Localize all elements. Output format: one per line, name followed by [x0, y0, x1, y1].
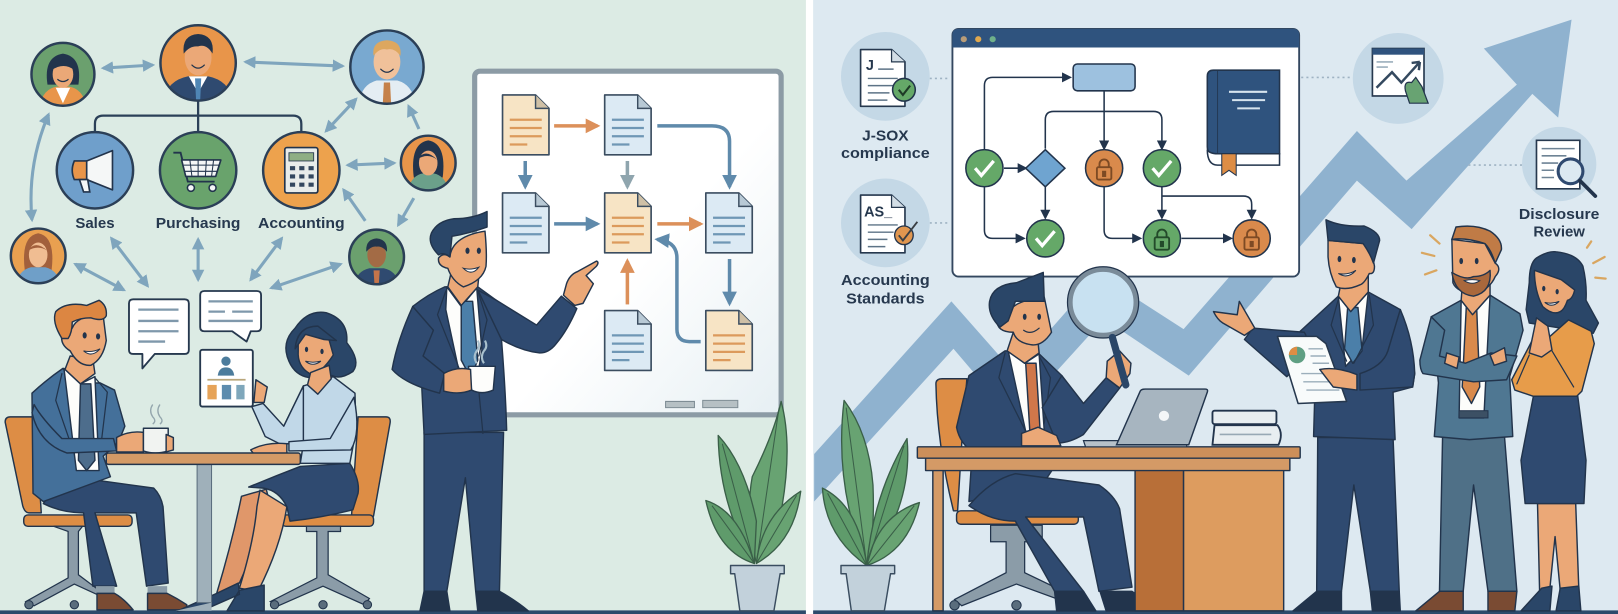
- desk with laptop and books: [917, 389, 1300, 611]
- skirt: [1521, 396, 1586, 504]
- fringe: [295, 326, 336, 349]
- icon: manual book: [1207, 70, 1280, 175]
- tie: [1462, 306, 1480, 403]
- chair wheels: [270, 601, 372, 609]
- head: [1452, 239, 1499, 293]
- hand on mug: [444, 369, 472, 393]
- flow lines: [984, 77, 1252, 238]
- avatar ring: woman orange right: [401, 136, 456, 190]
- arm seam: [1517, 351, 1574, 387]
- hair: [1526, 252, 1598, 333]
- title bar: [952, 29, 1299, 47]
- head: [997, 297, 1051, 345]
- mug and steam: [143, 405, 173, 453]
- hair: [1326, 220, 1380, 263]
- department icon: Sales megaphone: [57, 132, 133, 208]
- smile: [305, 361, 321, 364]
- table: [106, 453, 300, 611]
- plant right panel: [822, 400, 919, 611]
- label: Accounting Standards: [841, 272, 930, 307]
- speech bubble: right: [200, 291, 261, 342]
- icon: growth chart: [1353, 33, 1444, 124]
- tie: [78, 384, 95, 471]
- neck: [448, 273, 479, 305]
- avatar: blond man blue: [351, 31, 423, 103]
- beard: [1452, 270, 1490, 296]
- avatar ring: woman green: [31, 43, 94, 106]
- trousers: [43, 477, 168, 586]
- heels: [177, 583, 264, 611]
- icon: accounting standards document: AS_: [864, 205, 893, 221]
- arm: [32, 405, 117, 453]
- org chart card: [200, 350, 253, 407]
- lapels: [1331, 295, 1373, 363]
- belt: [1459, 411, 1488, 418]
- chair stem: [270, 526, 369, 606]
- eyes: [83, 332, 100, 340]
- skirt: [249, 463, 358, 521]
- smile: [1545, 301, 1559, 305]
- whiteboard frame: [475, 71, 781, 415]
- praying hands: [1529, 318, 1552, 357]
- shoes: [1055, 591, 1156, 611]
- back leg: [217, 489, 270, 593]
- tie: [461, 301, 478, 378]
- figure: woman clapping: [1512, 252, 1598, 611]
- arm to report: [1360, 310, 1415, 390]
- shoes: [97, 593, 187, 610]
- desk leg: [933, 470, 943, 611]
- label: Disclosure Review: [1519, 206, 1599, 240]
- socks: [96, 586, 167, 593]
- icon group: Accounting Standards: [841, 179, 930, 307]
- network arrows: [31, 62, 419, 290]
- hair: [989, 272, 1044, 327]
- neck: [308, 365, 331, 394]
- eyes: [1542, 286, 1559, 294]
- chair back: [936, 379, 967, 511]
- label: Accounting Standards: Standards: [846, 290, 925, 307]
- crossed arms: [1420, 317, 1517, 382]
- blouse: [1512, 320, 1594, 396]
- label: J-SOX compliance: [841, 127, 930, 162]
- chair seat: [282, 515, 374, 526]
- lapels: [999, 353, 1050, 431]
- hands: [1022, 351, 1131, 446]
- trousers: [969, 474, 1132, 591]
- shirt: [446, 287, 482, 382]
- tie: [1026, 363, 1040, 431]
- label: Accounting Standards: Accounting: [841, 272, 930, 289]
- avatar ring: blond man: [350, 30, 424, 104]
- shoes: [1293, 591, 1400, 611]
- hair: [55, 300, 106, 338]
- heels: [1521, 586, 1581, 611]
- marker tray: [666, 400, 738, 408]
- leaves: [822, 400, 919, 565]
- chair wheels: [25, 601, 78, 609]
- label: Sales: Sales: [75, 215, 115, 232]
- jacket: [32, 368, 125, 502]
- chair stem: [954, 525, 1078, 606]
- leaves: [706, 401, 801, 563]
- window frame: [952, 29, 1299, 277]
- pedestal: [1135, 470, 1184, 611]
- eyes: [305, 347, 324, 354]
- trousers: [424, 432, 504, 591]
- panel: cross-department network: [11, 25, 456, 290]
- flow arrows: [525, 126, 730, 342]
- pointing hand: [563, 261, 598, 305]
- icon: J-SOX document: J: [866, 58, 874, 74]
- tie: [1345, 308, 1362, 363]
- shirt: [1008, 351, 1044, 431]
- label: Disclosure Review: Review: [1533, 223, 1585, 240]
- label: J-SOX compliance: J-SOX: [862, 127, 909, 144]
- lock nodes: [1086, 150, 1270, 257]
- shirt: [64, 368, 99, 471]
- rising arrow chart background: [814, 20, 1572, 502]
- pot: [731, 565, 784, 611]
- lapels: [56, 374, 107, 454]
- plant left panel: [706, 401, 801, 611]
- panel: compliance background: [813, 0, 1618, 614]
- panel: collaboration background: [0, 0, 806, 614]
- pedestal front: [1184, 470, 1284, 611]
- trousers: [1317, 438, 1399, 591]
- head: [62, 316, 106, 365]
- jacket: [957, 351, 1073, 454]
- dotted connectors: [930, 77, 1522, 223]
- shoes: [420, 591, 528, 611]
- icon: disclosure magnifier: [1522, 127, 1596, 201]
- label: Disclosure Review: Disclosure: [1519, 206, 1599, 223]
- blouse arm table: [289, 397, 357, 451]
- figure: colleague arms crossed: [1416, 226, 1523, 611]
- pot: [841, 565, 895, 611]
- avatar ring: man green: [349, 230, 404, 284]
- front leg: [239, 490, 287, 591]
- chair back: [351, 417, 390, 526]
- figure: standing colleague with report: [1214, 220, 1415, 611]
- smile: [463, 267, 479, 272]
- neck: [1461, 281, 1490, 315]
- hands: [251, 380, 287, 454]
- department icon: Accounting calculator: [263, 132, 339, 208]
- chair wheels: [950, 601, 1021, 610]
- jacket: [1431, 295, 1523, 440]
- arm holding glass: [1042, 376, 1120, 443]
- mug: [468, 366, 495, 393]
- org chart connector: [95, 101, 301, 132]
- outstretched arm: [1244, 328, 1308, 377]
- figure: seated man left: [5, 300, 187, 610]
- floor line left: [0, 610, 806, 614]
- panel: whiteboard flow: [475, 71, 781, 415]
- hand on report: [1320, 369, 1357, 390]
- avatar: man green: [350, 230, 403, 286]
- eyes: [465, 248, 481, 254]
- label: J-SOX compliance: compliance: [841, 145, 930, 162]
- figure: presenter: [392, 212, 598, 611]
- label: Purchasing: Purchasing: [156, 215, 240, 232]
- jacket: [413, 287, 507, 434]
- face: [1534, 270, 1575, 313]
- avatar ring: woman orange left: [11, 229, 66, 283]
- open hand: [1214, 301, 1255, 335]
- trousers: [1439, 437, 1517, 591]
- steam: [475, 341, 486, 363]
- jacket: [1300, 292, 1415, 440]
- right arm: [478, 290, 577, 353]
- panel: review dashboard window: [952, 29, 1299, 277]
- decision diamond: [1026, 150, 1065, 187]
- eyes: [1338, 256, 1356, 263]
- window dots: [961, 36, 996, 42]
- neck: [65, 356, 95, 384]
- report: [1277, 336, 1347, 403]
- smile: [1024, 328, 1039, 332]
- left arm: [392, 306, 445, 393]
- face: [298, 333, 333, 374]
- chair seat: [24, 515, 132, 526]
- shirt: [1338, 292, 1368, 366]
- department icon: Purchasing cart: [160, 132, 236, 208]
- desk under-top: [926, 457, 1290, 471]
- avatar: woman green: [32, 43, 94, 106]
- desk top: [917, 447, 1300, 458]
- avatar: woman orange right: [401, 136, 455, 192]
- speech bubble: left: [129, 299, 189, 368]
- mouth: [1464, 280, 1480, 283]
- chair seat: [957, 511, 1078, 524]
- process box: [1073, 64, 1135, 91]
- blouse: [284, 377, 356, 463]
- neck: [1338, 273, 1368, 312]
- neck: [1007, 332, 1039, 363]
- head: [1328, 240, 1374, 289]
- sparkle marks: [1422, 235, 1606, 279]
- laptop: [1083, 389, 1208, 447]
- lapels: [438, 291, 487, 433]
- shoes: [1416, 591, 1517, 611]
- book stack: [1212, 411, 1281, 445]
- avatar ring: man orange: [160, 25, 236, 101]
- hands: [1445, 348, 1507, 368]
- smile: [1338, 270, 1356, 276]
- hand: [117, 432, 143, 452]
- hair back: [286, 312, 356, 378]
- eyes: [1459, 258, 1479, 264]
- jacket lower: [969, 454, 1063, 502]
- chair back: [5, 417, 41, 513]
- eyes: [1023, 314, 1041, 320]
- head: [438, 231, 486, 287]
- shirt: [1459, 295, 1490, 418]
- legs: [1538, 504, 1579, 590]
- label: Accounting: Accounting: [258, 215, 345, 232]
- smile: [84, 349, 100, 354]
- hair: [1452, 226, 1501, 263]
- hair: [430, 212, 487, 257]
- icon group: Disclosure Review: [1519, 127, 1599, 240]
- check nodes: [966, 150, 1180, 257]
- figure: seated woman left: [106, 312, 390, 611]
- figure: seated reviewer: [936, 267, 1156, 611]
- avatar: woman orange left: [11, 229, 65, 285]
- avatar: man orange: [161, 26, 235, 101]
- blouse arm up: [252, 386, 303, 444]
- icon group: J-SOX compliance: [841, 32, 930, 162]
- chair stem: [26, 526, 99, 606]
- magnifying glass: [1067, 267, 1139, 385]
- document grid: [503, 95, 752, 370]
- floor line right: [813, 610, 1618, 614]
